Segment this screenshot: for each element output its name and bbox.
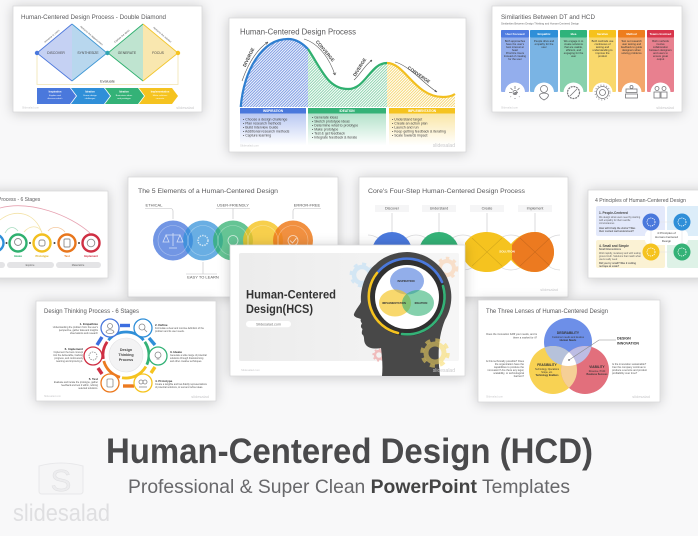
slide footer: slidesalad: [191, 394, 209, 399]
slide footer: slidesalad: [656, 105, 674, 110]
phase headers: [240, 108, 455, 114]
phase headers: IDEATION: [340, 109, 355, 113]
inner ring: [103, 332, 149, 378]
principle hub: [645, 222, 688, 252]
column: idea: user: [571, 54, 576, 58]
side questions: produce a service and product: [612, 368, 647, 372]
principle hub: Design: [662, 239, 671, 243]
slide footer: slidesalad: [632, 394, 650, 399]
stage labels: [14, 255, 98, 258]
diamond nodes: [35, 51, 180, 55]
column: iterative: understanding to: [592, 48, 613, 52]
ideation list: • Integrate feedback & iterate: [312, 136, 357, 140]
column: teams involved: [647, 30, 674, 92]
implementation list: • Create an action plan: [392, 122, 428, 126]
column: empathic: user: [541, 45, 547, 49]
process chevrons: [37, 88, 178, 104]
venn diagram: [529, 318, 609, 394]
stage labels: Ideate: [14, 254, 22, 258]
step leaders: [392, 213, 535, 233]
side questions: Is this technically possible? Does: [486, 359, 525, 363]
slide footer: Slidesalad.com: [486, 396, 503, 398]
principle text: Did you try small? Was it cutting: [599, 262, 637, 265]
venn labels: VIABILITY: [589, 365, 606, 369]
element labels: ERROR-FREE: [294, 202, 321, 208]
left stage text: feedback and test it within, refining: [61, 384, 99, 387]
step labels: [375, 205, 552, 212]
inspiration list: • Build Interview Guide: [243, 126, 278, 130]
arrow labels: [242, 39, 431, 84]
left stage text: observations and research: [70, 332, 99, 335]
slide heading: The Three Lenses of Human-Centered Design: [486, 308, 608, 315]
stage connectors: [6, 242, 80, 244]
slide: 4 principles (cropped right): [588, 190, 698, 278]
slide footer: [22, 105, 194, 110]
venn labels: Technology Enablers: [535, 375, 559, 377]
principle text: red tape at scale?: [599, 265, 620, 268]
stage labels: Test: [64, 254, 70, 258]
arrow labels: DIVERGE: [352, 57, 367, 77]
element labels: ETHICAL: [146, 202, 163, 208]
head ring: [368, 258, 446, 336]
ideation list: • Generate ideas: [312, 116, 338, 120]
principle text: [599, 211, 641, 268]
venn blobs: INSPIRATION: [397, 279, 415, 283]
slide: design process curve: [229, 18, 466, 152]
gear: olive and yellow: [422, 340, 448, 366]
subtitle: Professional & Super Clean PowerPoint Templates: [128, 476, 570, 498]
right stage text: solutions through brainstorming: [170, 357, 204, 360]
phase headers: INSPIRATION: [263, 109, 284, 113]
implementation list: • Launch and run: [392, 126, 419, 130]
right stage text: 4. Prototype: [155, 379, 173, 383]
venn labels: [535, 331, 608, 377]
venn blobs: IMPLEMENTATION: [382, 301, 406, 305]
stage labels: Prototype: [35, 254, 49, 258]
cover title: Design(HCS): [246, 302, 313, 316]
column: user focused: have the user's: [506, 42, 525, 46]
column: teams involved: output: [657, 57, 664, 61]
cover grey panel: [239, 253, 459, 361]
side questions: Is the innovation sustainable?: [612, 362, 647, 366]
stage icons: [89, 324, 161, 387]
column: empathic: Empathic: [537, 32, 551, 36]
slide footer: slidesalad: [433, 368, 455, 374]
diagonal notes: Explore the ideas: [114, 29, 131, 44]
stage icons: [14, 238, 95, 247]
diamond one: [37, 24, 107, 81]
side questions: there a market for it?: [513, 336, 538, 340]
inspiration list: • Additional research methods: [243, 130, 290, 134]
right stage text: problem and its user needs.: [155, 330, 185, 333]
gear: blue: [351, 264, 373, 286]
process chevrons: Explore and: [49, 94, 62, 97]
step labels: Create: [482, 206, 492, 210]
stage arcs: [0, 206, 90, 233]
slide footer: Slidesalad.com: [44, 395, 61, 398]
slide: three lenses: [478, 300, 660, 402]
element circles: [153, 220, 313, 260]
slide footer: [240, 143, 455, 149]
side questions: innovation? Are there any legal,: [488, 368, 524, 372]
left stage text: 1. Empathize: [80, 322, 98, 326]
column: iterative: improve the: [595, 51, 610, 55]
phase pills: Materialize: [72, 263, 85, 267]
slide heading: Similarities Between DT and HCD: [501, 14, 595, 21]
inspiration list: • Choose a design challenge: [243, 118, 287, 122]
slide heading: 4 Principles of Human-Centered Design: [595, 198, 686, 204]
column: iterative: testing and: [596, 45, 610, 49]
ideation list: • Determine what to prototype: [312, 124, 358, 128]
right stage text: and other creative techniques.: [170, 360, 202, 363]
step labels: Discover: [385, 206, 400, 210]
ideation list: • Make prototype: [312, 128, 338, 132]
process chevrons: Ideation: [85, 90, 95, 94]
implementation list: • Understand target: [392, 118, 422, 122]
diamond two: FOCUS: [152, 51, 165, 55]
brand logo: S: [51, 463, 71, 498]
ideation list: [312, 116, 358, 140]
column: method: [618, 30, 645, 92]
cover title: [246, 288, 336, 316]
right stage text: Formulate a clear and concise definition of the: [155, 327, 205, 330]
main title: Human-Centered Design (HCD): [106, 432, 593, 471]
principle text: with empathy for their real-life: [599, 219, 631, 222]
principle text: ground truth. Solutions that match what: [599, 255, 641, 258]
column: empathic: empathy for the: [535, 42, 554, 46]
column: user focused: best interest at: [506, 45, 524, 49]
step blobs: [372, 232, 554, 272]
left stage text: 5. Test: [89, 377, 98, 381]
principle text: 1. People-Centered: [599, 211, 628, 215]
diamond one: SYNTHESIZE: [77, 51, 99, 55]
venn labels: Business Success: [586, 373, 608, 376]
evaluate label: Evaluate: [100, 80, 115, 84]
cover url pill: Slidesalad.com: [256, 322, 281, 326]
principle text: Small Interventions: [599, 248, 622, 251]
slide footer: Slidesalad.com: [241, 368, 261, 372]
step labels: Implement: [527, 206, 543, 210]
step blobs: SOLUTION: [499, 250, 515, 254]
process chevrons: and prototype: [117, 97, 131, 100]
column: idea: that are usable,: [564, 45, 583, 49]
stage rings: [84, 319, 167, 392]
column: iterative: Iterative: [597, 32, 608, 36]
process chevrons: concrete: [156, 97, 165, 100]
right stage text: of potential solutions, to test and refine ideas.: [155, 386, 203, 389]
hatched areas: [241, 39, 455, 107]
cover url pill: [246, 321, 291, 327]
column: iterative: continuous of: [594, 42, 611, 46]
column: user focused: Both approaches: [505, 39, 526, 43]
column: user focused: heart: [512, 48, 518, 52]
inner rings and icons: [158, 226, 308, 256]
column: idea: create solutions: [564, 42, 584, 46]
side questions: barriers?: [514, 374, 525, 378]
process chevrons: Implementation: [151, 90, 170, 94]
slide: design thinking cycle: [36, 301, 216, 401]
column: empathic: [530, 30, 558, 92]
slide footer: [486, 394, 650, 399]
venn labels: Revenue, Profit: [589, 370, 606, 373]
column: idea: We engage in to: [564, 39, 584, 43]
principle hub: 4 Principles of: [657, 231, 676, 235]
label leader lines: [145, 208, 321, 274]
column: teams involved: and users to: [653, 51, 668, 55]
column icons: [505, 82, 670, 102]
implementation list: • Scale towards impact: [392, 134, 427, 138]
principle text: users really need: [599, 258, 618, 261]
arrow labels: CONVERGE: [315, 39, 336, 63]
venn labels: FEASIBILITY: [537, 363, 558, 367]
curve line: [241, 39, 455, 107]
diagonal notes: [44, 25, 172, 47]
principle hub: Human-Centered: [655, 235, 678, 239]
venn labels: Human Needs: [560, 339, 577, 342]
slide footer: [501, 105, 674, 110]
ideation list: • Sketch prototype ideas: [312, 120, 350, 124]
slide footer: [44, 394, 209, 399]
left stage text: perspective, gather data and insights: [59, 329, 99, 332]
slide footer: Slidesalad.com: [501, 106, 518, 110]
left stage text: Evaluate and iterate the prototype, gather: [54, 381, 98, 384]
column: iterative: Both methods use: [592, 39, 614, 43]
principle text: Work rapidly, iteratively and with testing: [599, 252, 641, 255]
left stage text: [53, 322, 99, 390]
cover title: Human-Centered: [246, 288, 336, 302]
slide: double diamond: [13, 6, 202, 112]
right stage text: Generate a wide range of potential: [170, 354, 207, 357]
inspiration list: • Capture learning: [243, 134, 271, 138]
left stage text: learning and improving it.: [56, 360, 83, 363]
brand logo: slidesalad: [13, 500, 110, 527]
inspiration list: • Plan research methods: [243, 122, 281, 126]
column: method: feedback to guide: [621, 45, 643, 49]
slide heading: Design Thinking Process - 6 Stages: [44, 309, 139, 315]
slide footer: Slidesalad.com: [22, 106, 39, 110]
left stage text: selected solutions.: [78, 387, 98, 390]
process chevrons: Frame design: [83, 94, 97, 97]
column: teams involved: between designers: [649, 48, 672, 52]
column: iterative: [589, 30, 616, 92]
principle icons: [642, 214, 690, 260]
slide: process 6 stages (cropped left): [0, 191, 108, 278]
arrow labels: DIVERGE: [242, 47, 255, 68]
column: user focused: Prioritize Users: [506, 51, 525, 55]
venn labels: Technology, Operations: [535, 368, 560, 371]
implementation list: • Keep getting feedback & iterating: [392, 130, 446, 134]
column: method: user testing and: [622, 42, 642, 46]
slide heading: The 5 Elements of a Human-Centered Design: [138, 188, 278, 195]
element labels: USER-FRIENDLY: [217, 202, 249, 208]
slide: core four-step: [359, 177, 568, 297]
brain circle: [375, 265, 439, 329]
head silhouette: [354, 252, 451, 376]
slide heading: Human-Centered Design Process: [240, 28, 356, 36]
column: idea: efficient, and: [566, 48, 582, 52]
slide heading: Core's Four-Step Human-Centered Design Process: [368, 188, 526, 195]
column: iterative: product: [598, 54, 607, 58]
phase pills: Explore: [26, 263, 35, 267]
phase panels: [240, 114, 455, 146]
diamond two: GENERATE: [118, 51, 137, 55]
principle text: circumstances: [599, 222, 615, 225]
slide footer: Slidesalad.com: [240, 144, 260, 148]
cycle arrows: [97, 326, 155, 386]
stage labels: Implement: [84, 254, 98, 258]
ring arcs: [369, 259, 445, 334]
slide heading: Human-Centered Design Process - Double Diamond: [21, 14, 167, 21]
slide watermark: slidesalad: [540, 287, 558, 292]
column: method: designers when: [622, 48, 641, 52]
stage rings: [0, 234, 100, 252]
principle text: their context well understood?: [599, 230, 634, 233]
innovation callout: [568, 336, 639, 361]
diamond one: DISCOVER: [47, 51, 65, 55]
column: method: Method: [626, 32, 637, 36]
slide footer: [241, 368, 455, 374]
column: empathic: People drive and: [534, 39, 555, 43]
venn labels: Customer needs and desires: [552, 336, 585, 339]
gear: red: [373, 349, 385, 361]
element labels: [146, 202, 321, 280]
process chevrons: Brainstorm ideas: [116, 94, 133, 97]
column: method: solving problems: [621, 51, 642, 55]
process chevrons: challenges: [85, 98, 96, 100]
right stage text: Create a tangible and low-fidelity representations: [155, 383, 208, 386]
left stage text: 6. Implement: [65, 347, 83, 351]
slide footer: slidesalad: [433, 143, 455, 149]
innovation callout: DESIGN: [617, 336, 631, 340]
arrow labels: CONVERGE: [407, 65, 431, 84]
hub: [109, 338, 143, 372]
column: user focused: User Focused: [505, 32, 525, 36]
direction arrows: [242, 39, 437, 92]
left stage text: into the deliverable, tracking: [53, 354, 84, 357]
element labels: EASY TO LEARN: [187, 274, 219, 280]
column: idea: Idea: [571, 32, 577, 36]
phase headers: IMPLEMENTATION: [408, 109, 437, 113]
process chevrons: Ideation: [119, 90, 129, 94]
left stage text: Implement the best concept: [54, 351, 83, 354]
venn blobs: [379, 268, 434, 316]
side questions: Does the innovation fulfill your needs, and is: [486, 332, 538, 336]
side questions: capabilities to produce the: [494, 365, 525, 369]
innovation callout: INNOVATION: [617, 342, 639, 346]
brand logo: [13, 463, 110, 527]
ideation list: • Test & get feedback: [312, 132, 345, 136]
column: teams involved: ensure great: [653, 54, 668, 58]
column: teams involved: Teams Involved: [650, 32, 671, 36]
hub: Design: [120, 348, 133, 352]
diamond two: [108, 24, 178, 81]
column: method: Test out research: [621, 39, 642, 43]
process chevrons: discover what's: [48, 97, 63, 100]
side questions: profitability over time?: [612, 371, 638, 375]
principle text: 4. Small and Simple: [599, 244, 629, 248]
column: user focused: for the user: [508, 57, 522, 61]
inspiration list: [243, 118, 290, 138]
side questions: the organization have the: [495, 362, 525, 366]
right stage text: 3. Ideate: [170, 350, 182, 354]
side questions: scalability, or technological: [493, 371, 524, 375]
gear: orange: [437, 258, 457, 278]
side questions: Can the company continue to: [612, 365, 646, 369]
column: teams involved: involve: [656, 42, 665, 46]
step labels: Understand: [430, 206, 448, 210]
background waves: [368, 235, 560, 270]
slide subheading: Similarities Between Design Thinking and Human-Centered Design: [501, 22, 580, 26]
column: teams involved: collaboration: [653, 45, 669, 49]
hub: Thinking: [118, 353, 134, 357]
process chevrons: Inspiration: [49, 90, 62, 94]
slide: similarities DT and HCD: [492, 6, 682, 112]
right stage text: [155, 323, 208, 389]
slide footer: slidesalad: [176, 105, 194, 110]
column: teams involved: Both methods: [652, 39, 669, 43]
process chevrons: Make solutions: [153, 94, 168, 97]
left stage text: Understanding the problem from the user's: [53, 326, 99, 329]
left stage text: progress, and continuously: [54, 357, 84, 360]
hub: Process: [119, 358, 133, 362]
column: user focused: Instead of creating: [504, 54, 527, 58]
principle text: We design what users need by starting: [599, 216, 641, 219]
right stage text: 2. Define: [155, 323, 168, 327]
slide: 5 elements: [128, 177, 338, 297]
column: idea: [560, 30, 587, 92]
venn labels: Scope, etc.: [541, 371, 553, 374]
diagonal notes: Reframe the opportunities: [79, 25, 104, 47]
column: user focused: [501, 30, 529, 92]
side questions: [486, 332, 647, 378]
venn blobs: IDEATION: [415, 301, 427, 305]
phase pills: [0, 262, 101, 268]
diagonal notes: Reframe the solution: [152, 26, 172, 44]
column: idea: engaging for the: [564, 51, 584, 55]
venn labels: DESIRABILITY: [557, 331, 580, 335]
slide: center cover: [230, 245, 465, 376]
principle panels: [596, 206, 698, 268]
principle text: How will it help the visitor? Was: [599, 227, 636, 230]
implementation list: [392, 118, 446, 138]
diagonal notes: Immerse in users: [44, 29, 61, 44]
evaluate frame: [37, 53, 178, 84]
